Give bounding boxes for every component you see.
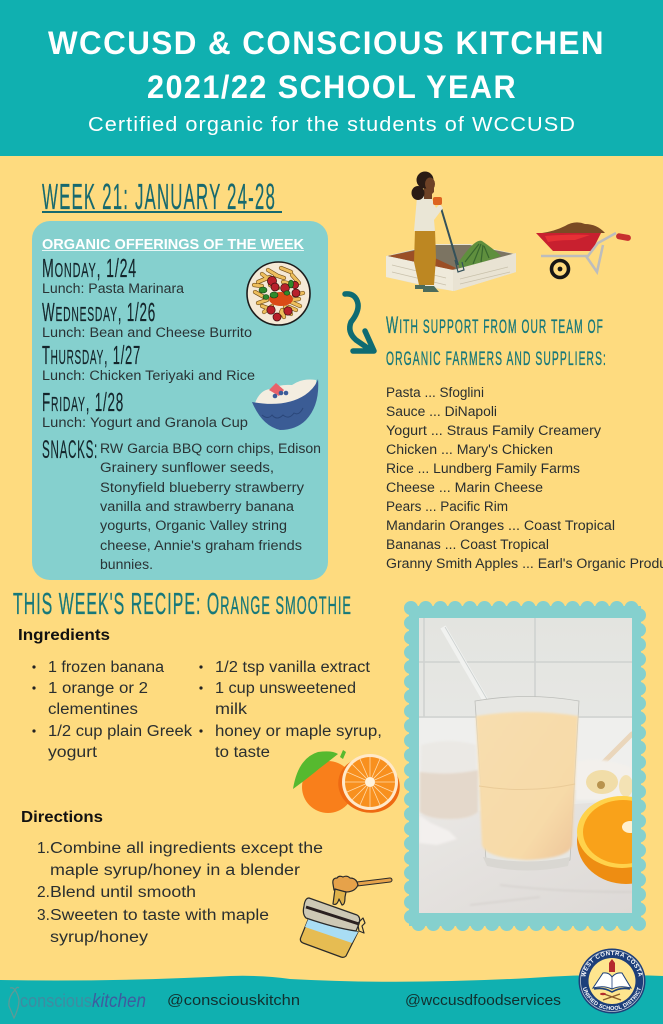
directions list: 3. xyxy=(37,907,50,924)
wednesday menu: Lunch: Bean and Cheese Burrito xyxy=(42,325,252,340)
ingredients column 1: 1 orange or 2 xyxy=(48,680,148,697)
snacks list: Stonyfield blueberry strawberry xyxy=(100,480,304,495)
directions list: Combine all ingredients except the xyxy=(50,840,323,857)
supplier list: Rice ... Lundberg Family Farms xyxy=(386,461,580,476)
conscious kitchen logo: conscious xyxy=(20,991,92,1011)
ingredients column 2: milk xyxy=(215,701,247,718)
title line 2: 2021/22 SCHOOL YEAR xyxy=(147,69,517,105)
snacks list: cheese, Annie's graham friends xyxy=(100,538,302,553)
supplier list: Pears ... Pacific Rim xyxy=(386,499,508,514)
instagram handle: conscious kitchen: @consciouskitchn xyxy=(167,992,300,1009)
title line 1: WCCUSD & CONSCIOUS KITCHEN xyxy=(48,25,605,61)
monday menu xyxy=(42,253,185,296)
panel heading: ORGANIC OFFERINGS OF THE WEEK xyxy=(42,236,304,253)
snacks list: Grainery sunflower seeds, xyxy=(100,460,274,475)
directions list: maple syrup/honey in a blender xyxy=(50,862,300,879)
directions list: 1. xyxy=(37,840,50,857)
supplier list: Cheese ... Marin Cheese xyxy=(386,480,543,495)
illustration: farmer at garden bed xyxy=(386,172,516,292)
snacks list: yogurts, Organic Valley string xyxy=(100,518,287,533)
supplier list: Bananas ... Coast Tropical xyxy=(386,537,549,552)
district seal xyxy=(578,948,646,1014)
poster canvas: WEEK 21: JANUARY 24-28 xyxy=(42,176,276,217)
ingredients column 2: to taste xyxy=(215,744,270,761)
subtitle: Certified organic for the students of WCCUSD xyxy=(88,113,576,136)
arrow xyxy=(345,294,374,351)
friday menu: Lunch: Yogurt and Granola Cup xyxy=(42,415,248,430)
directions list: Sweeten to taste with maple xyxy=(50,907,269,924)
directions list: 2. xyxy=(37,884,50,901)
snacks list: vanilla and strawberry banana xyxy=(100,499,295,514)
monday menu: MONDAY, 1/24 xyxy=(42,253,137,283)
monday menu: Lunch: Pasta Marinara xyxy=(42,281,185,296)
snacks list: bunnies. xyxy=(100,557,153,572)
directions list: syrup/honey xyxy=(50,929,148,946)
smoothie photo xyxy=(419,618,632,913)
snacks list xyxy=(100,441,321,572)
directions list: Blend until smooth xyxy=(50,884,196,901)
friday menu xyxy=(42,387,248,430)
thursday menu: THURSDAY, 1/27 xyxy=(42,340,141,370)
ingredients column 1: yogurt xyxy=(48,744,98,761)
icon: pasta plate xyxy=(247,262,310,325)
ingredients column 1: 1 frozen banana xyxy=(48,659,164,676)
ingredients column 2: 1/2 tsp vanilla extract xyxy=(215,659,371,676)
icon: yogurt bowl xyxy=(252,379,318,430)
supplier list: Pasta ... Sfoglini xyxy=(386,385,484,400)
icon: oranges xyxy=(293,750,406,820)
snacks list: RW Garcia BBQ corn chips, Edison xyxy=(100,441,321,456)
ingredients column 2: honey or maple syrup, xyxy=(215,723,382,740)
panel: organic offerings: SNACKS: xyxy=(42,436,98,464)
thursday menu: Lunch: Chicken Teriyaki and Rice xyxy=(42,368,255,383)
supplier list xyxy=(386,385,663,571)
photo frame xyxy=(409,606,663,926)
panel: organic offerings xyxy=(32,221,328,580)
district seal: WEST CONTRA COSTA xyxy=(581,950,642,977)
thursday menu xyxy=(42,340,255,383)
supplier list: Yogurt ... Straus Family Creamery xyxy=(386,423,601,438)
farmer xyxy=(412,172,464,292)
ingredients column 2 xyxy=(199,659,382,761)
conscious kitchen logo: kitchen xyxy=(92,991,146,1012)
directions list xyxy=(37,840,323,946)
conscious kitchen logo xyxy=(9,987,146,1018)
ingredients heading: Ingredients xyxy=(18,627,110,644)
ingredients column 2: 1 cup unsweetened xyxy=(215,680,356,697)
supplier list: Granny Smith Apples ... Earl's Organic Produce xyxy=(386,556,663,571)
icon: wheelbarrow xyxy=(536,222,631,278)
icon: honey jar and dipper xyxy=(300,876,390,957)
supplier list: Sauce ... DiNapoli xyxy=(386,404,497,419)
ingredients column 1 xyxy=(32,659,192,761)
garden bed xyxy=(386,241,516,291)
directions heading: Directions xyxy=(21,809,103,826)
recipe heading: THIS WEEK'S RECIPE: ORANGE SMOOTHIE xyxy=(13,586,352,621)
district seal: UNIFIED SCHOOL DISTRICT xyxy=(583,987,641,1010)
header banner xyxy=(0,0,663,156)
supplier list: Mandarin Oranges ... Coast Tropical xyxy=(386,518,615,533)
friday menu: FRIDAY, 1/28 xyxy=(42,387,124,417)
instagram handle: wccusd food services: @wccusdfoodservices xyxy=(405,992,561,1009)
footer band xyxy=(0,948,663,1024)
wednesday menu: WEDNESDAY, 1/26 xyxy=(42,297,156,327)
support heading xyxy=(386,312,607,370)
ingredients column 1: clementines xyxy=(48,701,138,718)
ingredients column 1: 1/2 cup plain Greek xyxy=(48,723,192,740)
wednesday menu xyxy=(42,297,252,340)
supplier list: Chicken ... Mary's Chicken xyxy=(386,442,553,457)
